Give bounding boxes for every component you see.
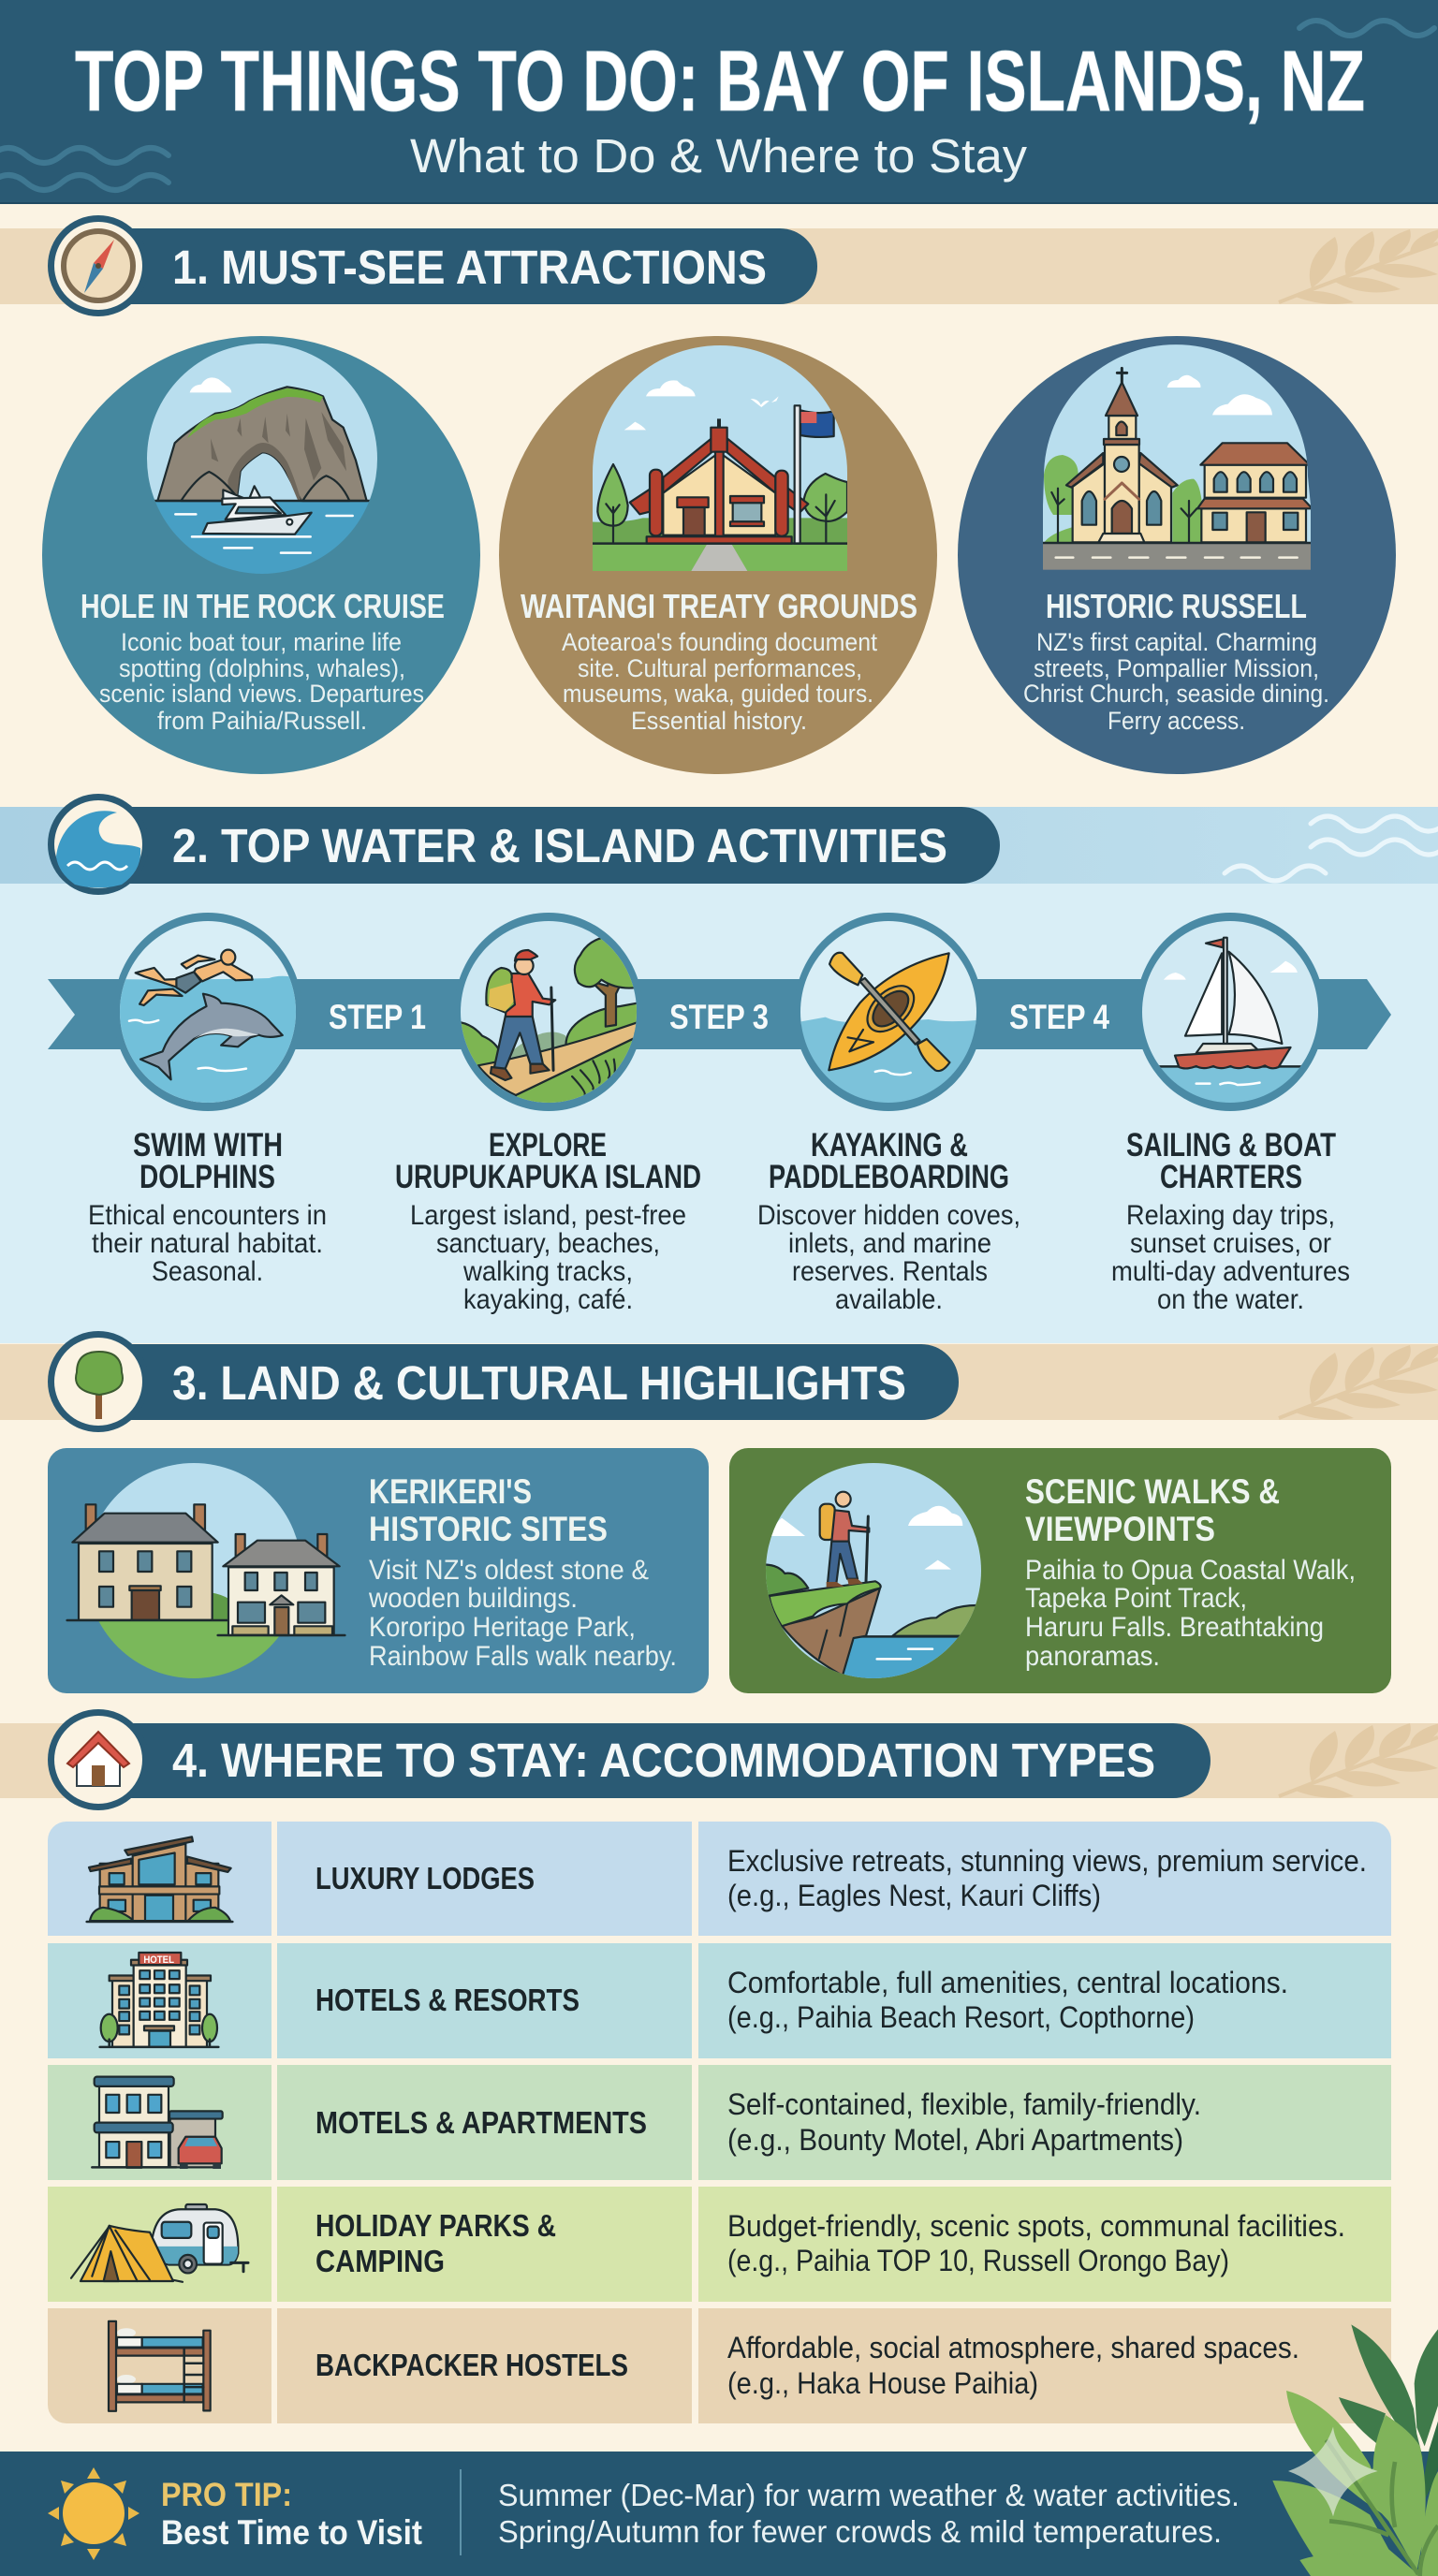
heading: WAITANGI TREATY GROUNDS [521, 587, 917, 625]
illustration: meeting house and flag [593, 345, 847, 571]
description: Tapeka Point Track, [1025, 1583, 1247, 1614]
description: Visit NZ's oldest stone & [369, 1555, 649, 1586]
activity: swim with dolphins [88, 1127, 327, 1287]
illustration: rock arch and boat [147, 344, 377, 574]
description: panoramas. [1025, 1641, 1160, 1672]
activity: kayaking [757, 1127, 1020, 1315]
activity: kayaking: available. [835, 1284, 943, 1315]
step circle: explore urupukapuka island [453, 911, 645, 1111]
step label 3: STEP 3 [669, 998, 769, 1036]
footer bar [0, 2452, 1438, 2576]
activity: explore urupukapuka: Largest island, pest-free [410, 1200, 686, 1231]
activity: sailing: multi-day adventures [1111, 1256, 1350, 1287]
activity: swim with dolphins: Ethical encounters in [88, 1200, 327, 1231]
activity: explore urupukapuka: URUPUKAPUKA ISLAND [395, 1159, 701, 1195]
description: Haruru Falls. Breathtaking [1025, 1612, 1324, 1643]
description [1025, 1555, 1356, 1672]
description: Affordable, social atmosphere, shared spaces. [727, 2331, 1299, 2364]
section 4 heading text: 4. WHERE TO STAY: ACCOMMODATION TYPES [172, 1734, 1155, 1787]
activity: kayaking: KAYAKING & [811, 1127, 968, 1164]
description: (e.g., Paihia TOP 10, Russell Orongo Bay) [727, 2244, 1229, 2277]
divider [460, 2469, 462, 2555]
label [315, 2208, 556, 2278]
activity: sailing [1111, 1127, 1350, 1315]
step circle: sailing [1140, 913, 1320, 1111]
pro tip heading: PRO TIP: [161, 2477, 292, 2513]
activity: sailing: CHARTERS [1160, 1159, 1302, 1195]
pro tip text [498, 2478, 1240, 2549]
description: spotting (dolphins, whales), [119, 654, 405, 682]
step label 4: STEP 4 [1009, 998, 1109, 1036]
description: museums, waka, guided tours. [563, 680, 873, 708]
activity: explore urupukapuka: sanctuary, beaches, [436, 1228, 660, 1259]
pro tip heading: Best Time to Visit [161, 2513, 422, 2552]
wave decoration top right [1299, 21, 1434, 36]
section 2 heading text: 2. TOP WATER & ISLAND ACTIVITIES [172, 819, 947, 872]
activity: explore urupukapuka: EXPLORE [489, 1127, 607, 1164]
activity: kayaking: PADDLEBOARDING [769, 1159, 1009, 1195]
icon: house [48, 1709, 149, 1810]
illustration: church and historic building [1034, 344, 1315, 570]
pro tip text: Spring/Autumn for fewer crowds & mild temperatures. [498, 2514, 1222, 2549]
section 3 heading band [0, 1331, 1438, 1432]
section 2 heading band [0, 794, 1438, 895]
section 1 heading band [0, 215, 1438, 316]
subtitle: What to Do & Where to Stay [410, 129, 1028, 183]
description: Essential history. [631, 707, 807, 735]
description [1023, 628, 1329, 735]
label: BACKPACKER HOSTELS [315, 2348, 628, 2382]
description: (e.g., Eagles Nest, Kauri Cliffs) [727, 1879, 1101, 1912]
description: wooden buildings. [368, 1583, 578, 1614]
panel: historic russell [958, 336, 1396, 774]
description [727, 2331, 1299, 2400]
panel: hole in the rock cruise [42, 336, 480, 774]
wave decoration [1225, 816, 1438, 881]
description: Comfortable, full amenities, central locations. [727, 1966, 1288, 1999]
activity: kayaking: Discover hidden coves, [757, 1200, 1020, 1231]
description [562, 628, 877, 735]
label: HOTELS & RESORTS [315, 1983, 580, 2017]
table row: hotels and resorts [48, 1943, 1391, 2058]
description: Ferry access. [1108, 707, 1245, 735]
description: Paihia to Opua Coastal Walk, [1025, 1555, 1356, 1586]
description [727, 1844, 1367, 1912]
activity: swim with dolphins: DOLPHINS [139, 1159, 275, 1195]
icon: motel [92, 2077, 223, 2169]
heading: KERIKERI'S [369, 1472, 532, 1511]
activity: kayaking: reserves. Rentals [792, 1256, 988, 1287]
pro tip text: Summer (Dec-Mar) for warm weather & water activities. [498, 2478, 1240, 2512]
table row: holiday parks and camping [48, 2187, 1391, 2302]
step circle: swim with dolphins [110, 911, 302, 1114]
heading: HISTORIC RUSSELL [1046, 587, 1307, 625]
section 4 heading band [0, 1709, 1438, 1810]
description: scenic island views. Departures [99, 680, 424, 708]
description: (e.g., Paihia Beach Resort, Copthorne) [727, 2000, 1195, 2034]
activity: explore urupukapuka: kayaking, café. [463, 1284, 633, 1315]
pro tip heading [161, 2477, 422, 2552]
label: MOTELS & APARTMENTS [315, 2105, 647, 2140]
description: site. Cultural performances, [578, 654, 862, 682]
illustration: hiker on cliff [766, 1463, 981, 1678]
wave decoration left [0, 148, 169, 190]
label: LUXURY LODGES [315, 1861, 535, 1895]
panel: kerikeri historic sites: HISTORIC SITES [369, 1510, 608, 1548]
activity: swim with dolphins: SWIM WITH [133, 1127, 283, 1164]
label: CAMPING [315, 2244, 445, 2278]
description [99, 628, 424, 735]
table row: motels and apartments [48, 2065, 1391, 2180]
description: (e.g., Bounty Motel, Abri Apartments) [727, 2123, 1183, 2157]
heading: SCENIC WALKS & [1025, 1472, 1280, 1511]
icon: lodge [87, 1837, 232, 1922]
description: (e.g., Haka House Paihia) [727, 2366, 1038, 2400]
arrow ribbon [48, 979, 1391, 1049]
step circle: kayaking [800, 913, 977, 1111]
description: streets, Pompallier Mission, [1034, 654, 1319, 682]
description: NZ's first capital. Charming [1036, 628, 1317, 656]
table row: backpacker hostels [48, 2308, 1391, 2423]
icon: tent and caravan [71, 2204, 248, 2282]
description: Budget-friendly, scenic spots, communal facilities. [727, 2209, 1345, 2243]
panel: waitangi treaty grounds [499, 336, 937, 774]
description: Exclusive retreats, stunning views, premium service. [727, 1844, 1367, 1878]
description: from Paihia/Russell. [157, 707, 367, 735]
illustration: historic buildings [66, 1456, 346, 1690]
icon: sun [48, 2467, 139, 2560]
panel: scenic walks and viewpoints: VIEWPOINTS [1025, 1510, 1215, 1548]
section 3 heading text: 3. LAND & CULTURAL HIGHLIGHTS [172, 1356, 906, 1410]
activity: sailing: sunset cruises, or [1130, 1228, 1331, 1259]
icon: bunk bed [109, 2321, 211, 2411]
header banner [0, 0, 1438, 204]
leaf decoration [1272, 2324, 1438, 2576]
description: Rainbow Falls walk nearby. [369, 1641, 677, 1672]
icon: tree [48, 1331, 149, 1432]
activity: kayaking: inlets, and marine [788, 1228, 991, 1259]
description: Self-contained, flexible, family-friendly. [727, 2087, 1201, 2121]
description: Kororipo Heritage Park, [369, 1612, 636, 1643]
sparkle [1288, 2427, 1378, 2516]
step label 1: STEP 1 [329, 998, 426, 1036]
table row: luxury lodges [48, 1822, 1391, 1936]
panel: kerikeri historic sites [48, 1448, 709, 1693]
section 1 heading text: 1. MUST-SEE ATTRACTIONS [172, 241, 767, 294]
icon: wave [48, 794, 149, 895]
icon: hotel [100, 1953, 218, 2047]
activity: swim with dolphins: their natural habitat. [92, 1228, 323, 1259]
description [368, 1555, 677, 1672]
panel: scenic walks and viewpoints [729, 1448, 1391, 1693]
description [727, 2087, 1201, 2157]
activity: sailing: Relaxing day trips, [1126, 1200, 1335, 1231]
description: Aotearoa's founding document [562, 628, 877, 656]
icon: hotel: HOTEL [143, 1954, 174, 1966]
description: Iconic boat tour, marine life [121, 628, 402, 656]
activity: sailing: SAILING & BOAT [1126, 1127, 1336, 1164]
activity: explore urupukapuka [395, 1127, 701, 1315]
description [727, 2209, 1345, 2277]
heading: HOLE IN THE ROCK CRUISE [81, 587, 445, 625]
description: Christ Church, seaside dining. [1023, 680, 1329, 708]
section 2 background [0, 884, 1438, 1343]
activity: swim with dolphins: Seasonal. [152, 1256, 263, 1287]
activity: explore urupukapuka: walking tracks, [462, 1256, 633, 1287]
icon: compass [48, 215, 149, 316]
description [727, 1966, 1288, 2034]
label: HOLIDAY PARKS & [315, 2208, 556, 2243]
activity: sailing: on the water. [1157, 1284, 1304, 1315]
